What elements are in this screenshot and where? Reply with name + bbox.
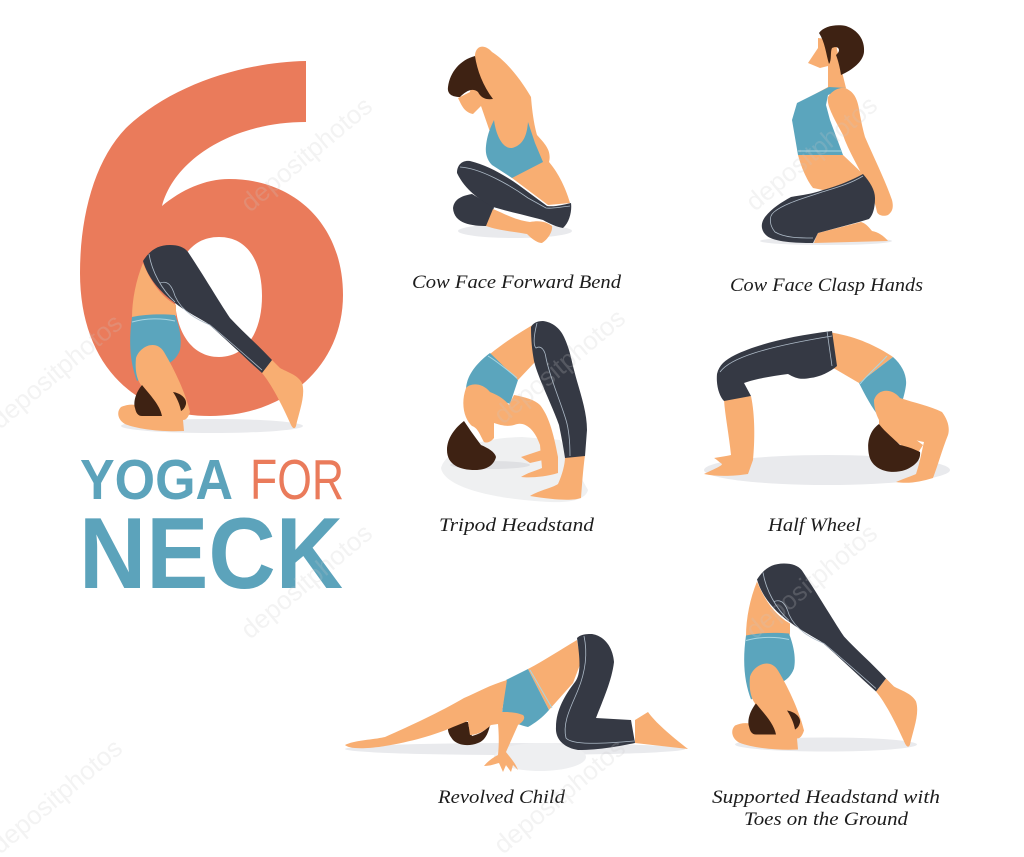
pose on the six: supported headstand — [118, 245, 303, 433]
caption: supported headstand with toes on the ground: Supported Headstand with — [712, 787, 940, 808]
watermark: depositphotos — [740, 90, 883, 217]
watermark: depositphotos — [740, 518, 883, 645]
title word: for: FOR — [250, 448, 344, 512]
watermark: depositphotos — [488, 303, 631, 430]
pose: cow face forward bend — [448, 47, 572, 243]
big number six — [80, 61, 343, 416]
pose: tripod headstand — [441, 321, 588, 502]
caption: supported headstand with toes on the ground — [712, 787, 940, 830]
caption: half wheel: Half Wheel — [767, 515, 861, 536]
watermark — [0, 90, 883, 857]
caption: cow face clasp hands: Cow Face Clasp Hands — [730, 275, 923, 296]
pose: cow face clasp hands — [760, 25, 893, 245]
caption: revolved child: Revolved Child — [437, 787, 566, 808]
caption: supported headstand with toes on the ground: Toes on the Ground — [744, 809, 909, 830]
title: neck: NECK — [79, 498, 343, 610]
pose: revolved child — [345, 634, 688, 772]
caption: tripod headstand: Tripod Headstand — [439, 515, 595, 536]
pose: supported headstand with toes on the ground — [732, 564, 917, 752]
watermark: depositphotos — [488, 733, 631, 857]
title: yoga for: YOGA — [80, 448, 233, 512]
caption: cow face forward bend: Cow Face Forward Bend — [412, 272, 622, 293]
pose: half wheel — [704, 331, 950, 485]
watermark: depositphotos — [235, 91, 378, 218]
watermark: depositphotos — [235, 518, 378, 645]
